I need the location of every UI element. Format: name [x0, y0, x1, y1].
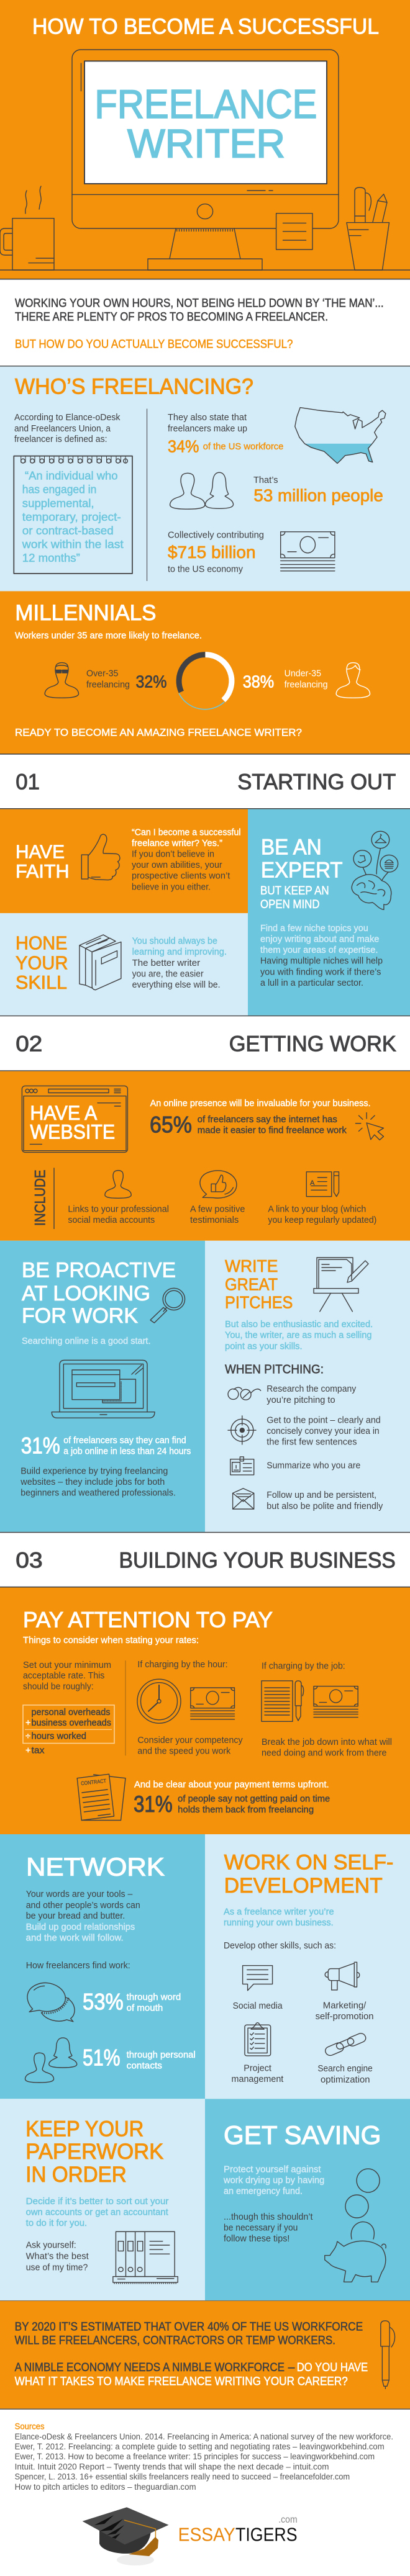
stat: 31 percent online: a job online in less than 24 hours — [63, 1446, 191, 1456]
heading: DEVELOPMENT — [224, 1874, 383, 1898]
icon: easel and pencil — [314, 1258, 368, 1312]
definition quote: work within the last — [22, 538, 124, 551]
minimum rate text: Set out your minimum — [23, 1660, 111, 1670]
body text: Decide if it’s better to sort out your — [26, 2197, 169, 2207]
skill: project management — [231, 2023, 283, 2084]
heading — [25, 2117, 163, 2187]
heading: IN ORDER — [25, 2163, 127, 2187]
body text: Find a few niche topics you — [260, 924, 368, 934]
body text: Build experience by trying freelancing — [20, 1466, 168, 1476]
heading — [16, 840, 70, 882]
body text — [20, 1466, 176, 1498]
stat: 34 percent: freelancers make up — [168, 424, 247, 434]
definition quote: 12 months” — [22, 552, 80, 564]
icon: brain with topics — [352, 831, 398, 909]
section heading: 02 getting work — [16, 1032, 396, 1056]
tip: research — [228, 1384, 357, 1405]
body text: your own abilities, your — [132, 860, 222, 870]
body text: learning and improving. — [132, 947, 227, 957]
body text: and the work will follow. — [26, 1933, 124, 1943]
heading: FAITH — [16, 860, 70, 882]
subheading: Workers under 35 are more likely to freelance. — [15, 631, 202, 641]
body text: you with finding work if there’s — [260, 967, 381, 977]
panel: pay attention to pay — [0, 1588, 410, 1834]
body text: an emergency fund. — [224, 2187, 303, 2197]
conclusion text: DO YOU HAVE — [297, 2361, 368, 2374]
skill: social media: Social media — [233, 2001, 283, 2011]
rate formula box: tax — [31, 1745, 45, 1755]
body text: websites – they include jobs for both — [20, 1477, 165, 1487]
screen headline: WRITER — [127, 120, 285, 166]
body text: If you don’t believe in — [132, 849, 214, 859]
heading: EXPERT — [261, 858, 343, 882]
charging by the job: Break the job down into what will — [262, 1737, 392, 1747]
stat: 34 percent: of the US workforce — [203, 441, 283, 452]
conclusion text: WILL BE FREELANCERS, CONTRACTORS OR TEMP WORKERS. — [15, 2334, 335, 2347]
stat: 31 percent late payment: 31% — [134, 1791, 173, 1817]
skill: marketing — [316, 1962, 374, 2022]
icon: young man — [336, 663, 370, 698]
body text: be your bread and butter. — [26, 1911, 125, 1921]
icon: notepad — [14, 456, 132, 574]
minimum rate text: should be roughly: — [23, 1682, 94, 1692]
sources: Sources — [15, 2422, 45, 2431]
section heading: 02 getting work: 02 — [16, 1032, 42, 1056]
body text — [132, 936, 227, 990]
body text: prospective clients won’t — [132, 871, 230, 881]
stat: personal contacts: through personal — [127, 2050, 196, 2060]
stat: 34 percent: They also state that — [168, 413, 247, 423]
enthusiasm text — [225, 1320, 373, 1352]
icon: banknotes — [281, 532, 335, 571]
title: HOW TO BECOME A SUCCESSFUL — [32, 15, 379, 39]
stat: word of mouth: through word — [127, 1993, 181, 2002]
charging by the hour: If charging by the hour: — [137, 1660, 228, 1670]
icon: magnifying glass — [150, 1288, 185, 1323]
tip: research: you’re pitching to — [266, 1395, 335, 1405]
intro text block: THERE ARE PLENTY OF PROS TO BECOMING A FREELANCER. — [15, 310, 328, 323]
icon: piggy bank with coins — [325, 2169, 386, 2282]
definition quote: temporary, project- — [22, 511, 121, 523]
over-35 label: Over-35 — [86, 669, 118, 678]
body text: Your words are your tools – — [26, 1889, 133, 1899]
include: blog link: A link to your blog (which — [268, 1204, 366, 1214]
stat: 53 million: That’s — [253, 475, 278, 485]
body text — [223, 2165, 324, 2244]
icon: two people — [170, 472, 234, 509]
body text — [26, 1889, 140, 1971]
icon: man with glasses — [45, 663, 79, 698]
definition quote: supplemental, — [22, 497, 94, 510]
sources: How to pitch articles to editors – theguardian.com — [15, 2482, 196, 2492]
stat: 31 percent late payment: holds them back from freelancing — [178, 1805, 314, 1815]
charging by the hour: Consider your competency — [137, 1736, 243, 1745]
heading: NETWORK — [26, 1852, 165, 1881]
body text: Protect yourself against — [224, 2165, 321, 2175]
under-35 label — [243, 669, 328, 691]
heading: BUT KEEP AN — [260, 885, 329, 898]
skill: seo: Search engine — [317, 2064, 373, 2074]
screen headline: FREELANCE — [94, 81, 317, 127]
body text: follow these tips! — [224, 2234, 289, 2244]
stat: 65 percent: of freelancers say the internet has — [198, 1115, 337, 1125]
heading — [30, 1102, 115, 1143]
intro text block: BUT HOW DO YOU ACTUALLY BECOME SUCCESSFUL? — [15, 338, 293, 351]
include: blog link: A — [310, 1179, 315, 1187]
sources: Elance-oDesk & Freelancers Union. 2014. Freelancing in America: A national survey of the new workforce. — [15, 2432, 393, 2441]
heading: HAVE A — [30, 1102, 98, 1124]
body text: running your own business. — [224, 1918, 334, 1928]
include: social links — [68, 1171, 169, 1225]
panel: write great pitches — [205, 1241, 410, 1532]
panel: conclusion — [0, 2301, 410, 2408]
tip: follow up: but also be polite and friendly — [266, 1502, 383, 1511]
under-35 label: freelancing — [285, 680, 328, 690]
wordmark — [178, 2515, 298, 2545]
stat: 31 percent late payment: of people say not getting paid on time — [178, 1795, 330, 1804]
icon: cursor click — [355, 1113, 383, 1140]
body text: believe in you either. — [132, 882, 211, 892]
heading: HAVE — [16, 840, 65, 862]
heading: GREAT — [225, 1274, 278, 1294]
desk lines — [0, 270, 410, 279]
minimum rate text: acceptable rate. This — [23, 1671, 104, 1681]
section heading: 01 starting out: STARTING OUT — [237, 770, 396, 794]
body text: How freelancers find work: — [26, 1961, 130, 1971]
heading — [224, 1851, 393, 1898]
include: testimonials — [190, 1171, 245, 1225]
body text — [26, 2197, 169, 2272]
over-35 label: 32% — [135, 672, 166, 691]
panel: be an expert — [248, 809, 410, 1016]
body text: everything else will be. — [132, 980, 221, 990]
heading — [16, 932, 68, 993]
over-35 label: freelancing — [86, 680, 130, 690]
body text: a lull in a particular sector. — [260, 978, 363, 988]
stat: 53 million — [253, 475, 383, 505]
subheading: Things to consider when stating your rates: — [23, 1636, 199, 1646]
panel: keep your paperwork in order — [0, 2099, 205, 2300]
enthusiasm text: But also be enthusiastic and excited. — [225, 1320, 373, 1330]
charging by the hour — [137, 1660, 243, 1757]
conclusion text — [15, 2321, 368, 2388]
definition quote: “An individual who — [25, 469, 118, 482]
wordmark: ESSAY — [178, 2524, 235, 2545]
body text: You should always be — [132, 936, 217, 946]
sources: Ewer, T. 2013. How to become a freelance writer: 15 principles for success – leavingworkbehind.com — [15, 2452, 375, 2461]
body text: you are, the easier — [132, 969, 204, 979]
icon: binders on shelf — [113, 2231, 178, 2283]
icon: desktop monitor — [72, 50, 339, 270]
heading: OPEN MIND — [260, 898, 319, 911]
body text: to do it for you. — [26, 2218, 87, 2228]
heading: PAY ATTENTION TO PAY — [23, 1608, 273, 1633]
charging by the job — [262, 1662, 392, 1758]
wordmark: TIGERS — [235, 2524, 298, 2545]
stat: 34 percent — [168, 413, 283, 456]
enthusiasm text: point as your skills. — [225, 1342, 303, 1352]
include: blog link — [268, 1172, 376, 1225]
body text: Ask yourself: — [26, 2241, 76, 2251]
heading: PITCHES — [225, 1292, 293, 1312]
icon: pen — [381, 2321, 395, 2389]
body text: The better writer — [132, 958, 200, 968]
tip: research: Research the company — [266, 1384, 357, 1394]
include label: INCLUDE — [32, 1169, 48, 1226]
body text: Having multiple niches will help — [260, 957, 383, 966]
tip: get to the point: Get to the point – clearly and — [266, 1415, 381, 1425]
stat: 31 percent online — [21, 1433, 191, 1459]
charging by the job: need doing and work from there — [262, 1748, 386, 1758]
heading: WRITE — [225, 1256, 278, 1276]
heading: WEBSITE — [30, 1121, 115, 1143]
icon: thumbs up — [81, 834, 120, 880]
definition intro: According to Elance-oDesk — [14, 413, 121, 423]
stat: word of mouth: 53% — [83, 1989, 124, 2015]
rate formula box: + — [25, 1718, 30, 1728]
wordmark: .com — [278, 2515, 298, 2525]
icon: sticky note — [276, 214, 312, 250]
definition intro: and Freelancers Union, a — [14, 424, 111, 434]
stat: 715 billion: to the US economy — [168, 565, 244, 575]
intro text block — [15, 297, 384, 351]
include: blog link: you keep regularly updated) — [268, 1215, 376, 1225]
payment terms text: And be clear about your payment terms upfront. — [134, 1780, 329, 1790]
body text — [132, 827, 241, 892]
heading: AT LOOKING — [22, 1282, 150, 1305]
definition intro — [14, 413, 121, 444]
section heading: 03 building your business: 03 — [16, 1549, 43, 1573]
tip: follow up — [233, 1488, 383, 1511]
conclusion text: – — [288, 2361, 295, 2374]
section heading: 01 starting out: 01 — [16, 770, 40, 794]
heading: WHO’S FREELANCING? — [15, 375, 253, 399]
tip: summarize: Summarize who you are — [266, 1461, 360, 1470]
logo: essaytigers — [83, 2507, 298, 2565]
rate formula box: ÷ — [25, 1732, 30, 1742]
heading: YOUR — [16, 952, 68, 973]
panel: network — [0, 1834, 205, 2099]
skill: project management: Project — [244, 2063, 271, 2073]
charging by the job: If charging by the job: — [262, 1662, 345, 1672]
rate formula box — [23, 1705, 114, 1755]
over-35 label — [86, 669, 166, 691]
heading: BE PROACTIVE — [22, 1259, 176, 1282]
conclusion text: BY 2020 IT’S ESTIMATED THAT OVER 40% OF THE US WORKFORCE — [15, 2321, 363, 2334]
rate formula box: hours worked — [31, 1732, 86, 1742]
icon: laptop — [52, 1360, 155, 1418]
body text: As a freelance writer you’re — [224, 1907, 334, 1917]
section heading: 01 starting out — [16, 770, 396, 794]
stat: 715 billion: $715 billion — [168, 543, 256, 562]
skill: seo: optimization — [321, 2075, 370, 2085]
stat: 715 billion: Collectively contributing — [168, 530, 264, 540]
heading: KEEP YOUR — [25, 2117, 144, 2141]
definition quote — [22, 469, 124, 564]
heading: HONE — [16, 932, 67, 953]
icon: graduation cap — [83, 2507, 169, 2565]
online presence text: An online presence will be invaluable for your business. — [150, 1099, 371, 1109]
tip: summarize — [230, 1457, 360, 1475]
section heading: 02 getting work: GETTING WORK — [229, 1032, 396, 1056]
icon: books — [80, 935, 121, 990]
skill: marketing: self-promotion — [316, 2012, 374, 2022]
skill: project management: management — [231, 2074, 283, 2084]
rate formula box: personal overheads — [31, 1708, 111, 1718]
body text: ...though this shouldn’t — [224, 2212, 313, 2222]
sources: Ewer, T. 2012. Freelancing: a complete guide to setting and negotiating rates – leavingworkbehind.com — [15, 2442, 385, 2451]
panel: hone your skill — [0, 913, 248, 1016]
heading: BE AN — [261, 835, 322, 860]
tip: follow up: Follow up and be persistent, — [266, 1490, 376, 1500]
subheading: Searching online is a good start. — [22, 1336, 150, 1346]
body text — [224, 1907, 336, 1951]
body text: be necessary if you — [224, 2223, 298, 2233]
panel: have a website — [0, 1071, 410, 1241]
body text: them your areas of expertise. — [260, 945, 378, 955]
conclusion text: A NIMBLE ECONOMY NEEDS A NIMBLE WORKFORCE — [15, 2361, 285, 2374]
icon: US map — [295, 408, 386, 463]
subheading: WHEN PITCHING: — [225, 1362, 324, 1376]
stat: 53 million: 53 million people — [253, 485, 383, 505]
body text — [260, 924, 383, 988]
body text: beginners and weathered professionals. — [20, 1488, 176, 1498]
heading — [260, 835, 343, 911]
body text: enjoy writing about and make — [260, 935, 379, 945]
enthusiasm text: You, the writer, are as much a selling — [225, 1331, 371, 1341]
definition intro: freelancer is defined as: — [14, 435, 107, 444]
stat: personal contacts: 51% — [83, 2045, 121, 2070]
heading — [225, 1256, 293, 1312]
include: testimonials: A few positive — [190, 1204, 245, 1214]
stat: 31 percent online: of freelancers say they can find — [63, 1436, 186, 1446]
stat: 65 percent: made it easier to find freelance work — [198, 1125, 347, 1135]
panel: be proactive — [0, 1241, 205, 1532]
stat: 34 percent: 34% — [168, 437, 199, 456]
body text: What’s the best — [26, 2252, 89, 2262]
skill: social media — [233, 1966, 283, 2011]
skill: seo — [317, 2032, 373, 2085]
heading — [22, 1259, 176, 1328]
panel: who's freelancing — [0, 366, 410, 591]
heading: WORK ON SELF- — [224, 1851, 393, 1875]
definition quote: or contract-based — [22, 525, 114, 537]
body text: own accounts or get an accountant — [26, 2208, 168, 2218]
stat: personal contacts — [25, 2038, 196, 2083]
stat: 31 percent online: 31% — [21, 1433, 60, 1459]
minimum rate text — [23, 1660, 111, 1692]
body text: Build up good relationships — [26, 1922, 135, 1932]
heading: PAPERWORK — [25, 2140, 163, 2164]
sources: Spencer, L. 2013. 16+ essential skills freelancers really need to succeed – freelancefolder.com — [15, 2472, 350, 2482]
tip: get to the point: concisely convey your idea in — [266, 1426, 380, 1436]
stat: word of mouth: of mouth — [127, 2003, 163, 2013]
charging by the hour: and the speed you work — [137, 1747, 231, 1757]
stat: personal contacts: contacts — [127, 2061, 162, 2071]
rate formula box: business overheads — [31, 1718, 111, 1728]
heading: SKILL — [16, 971, 67, 993]
icon: contract — [77, 1774, 125, 1820]
body text: use of my time? — [26, 2263, 88, 2272]
stat: 31 percent late payment — [134, 1791, 330, 1817]
sources — [15, 2422, 393, 2492]
icon: contract: CONTRACT — [81, 1778, 106, 1786]
body text: work drying up by having — [223, 2176, 324, 2186]
conclusion text: WHAT IT TAKES TO MAKE FREELANCE WRITING YOUR CAREER? — [15, 2375, 348, 2388]
rate formula box: + — [25, 1745, 30, 1755]
under-35 label: 38% — [243, 672, 274, 691]
under-35 label: Under-35 — [285, 669, 321, 678]
include: social links: Links to your professional — [68, 1204, 169, 1214]
heading: FOR WORK — [22, 1304, 138, 1328]
call to action: READY TO BECOME AN AMAZING FREELANCE WRITER? — [15, 726, 302, 738]
donut chart — [179, 655, 232, 709]
panel: self-development — [205, 1834, 410, 2099]
heading: GET SAVING — [224, 2120, 381, 2150]
panel: hero — [0, 0, 410, 279]
panel: get saving — [205, 2099, 410, 2300]
stat: 65 percent: 65% — [150, 1112, 192, 1137]
body text: Develop other skills, such as: — [224, 1941, 336, 1951]
tip: get to the point: the first few sentences — [266, 1438, 357, 1448]
stat: word of mouth — [27, 1983, 181, 2022]
icon: coffee mug — [0, 186, 54, 270]
skill: marketing: Marketing/ — [323, 2001, 367, 2011]
heading: MILLENNIALS — [15, 601, 156, 625]
include: testimonials: testimonials — [190, 1215, 239, 1225]
body text: freelance writer? Yes.” — [132, 839, 222, 849]
panel: have faith — [0, 809, 248, 913]
include: social links: social media accounts — [68, 1215, 155, 1225]
section heading: 03 building your business: BUILDING YOUR BUSINESS — [119, 1549, 396, 1573]
sources: Intuit. Intuit 2020 Report – Twenty trends that will shape the next decade – intuit.com — [15, 2462, 329, 2471]
definition quote: has engaged in — [22, 484, 96, 496]
icon: pen pot — [347, 187, 389, 270]
body text: and other people’s words can — [26, 1901, 140, 1911]
icon: browser window — [22, 1086, 127, 1152]
stat: 715 billion — [168, 530, 264, 575]
stat: 65 percent — [150, 1112, 347, 1137]
body text: “Can I become a successful — [132, 827, 241, 837]
panel: millennials — [0, 591, 410, 754]
tip: get to the point — [228, 1415, 381, 1448]
screen headline — [94, 81, 317, 166]
